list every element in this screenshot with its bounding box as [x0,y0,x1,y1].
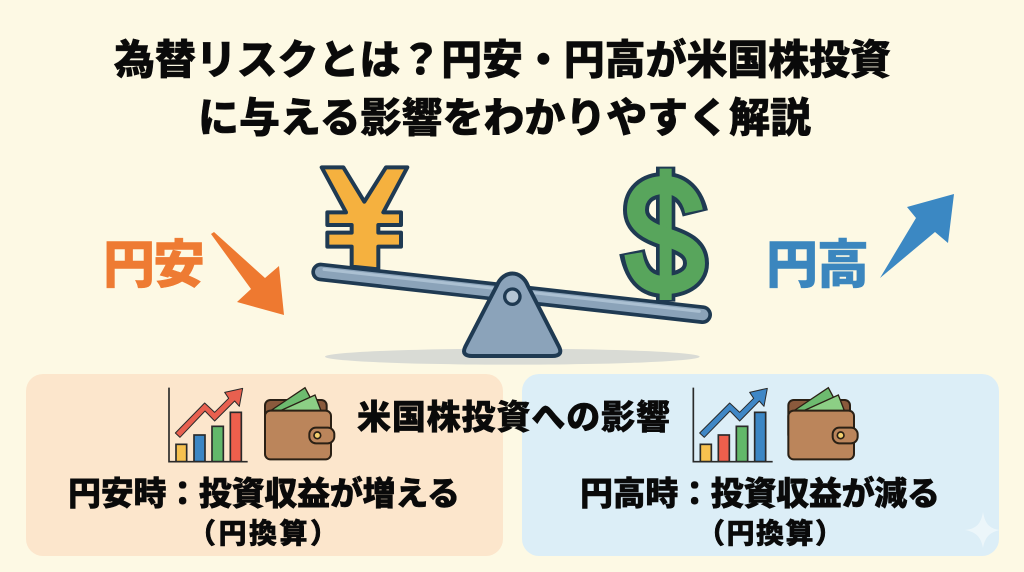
text: yen weak note: （円換算） [188,517,338,549]
icon: chart left [169,388,248,462]
panel: yen strong [522,374,999,556]
text: yen strong effect: 円高時：投資収益が減る [580,475,940,512]
seesaw illustration [321,167,703,365]
title: 為替リスクとは？円安・円高が米国株投資 [114,37,891,83]
icon: wallet left [265,388,334,459]
arrow: orange down [211,232,284,315]
label: 円安: 円安 [103,237,205,295]
text: yen strong note: （円換算） [697,517,843,549]
seesaw beam [321,269,703,315]
text: yen weak effect: 円安時：投資収益が増える [68,475,460,512]
fulcrum [464,273,560,356]
icon: yen [322,167,407,269]
arrow: blue up [880,194,954,278]
icon: sparkle [965,512,1000,548]
panel: yen weak [26,374,503,556]
icon: wallet right [788,388,858,459]
title [114,37,891,141]
icon: chart right [693,388,773,462]
subtitle: 米国株投資への影響 [357,399,670,437]
label: 円高: 円高 [766,237,869,295]
icon: dollar [632,167,696,302]
ground shadow [325,349,700,365]
title: に与える影響をわかりやすく解説 [198,95,811,141]
